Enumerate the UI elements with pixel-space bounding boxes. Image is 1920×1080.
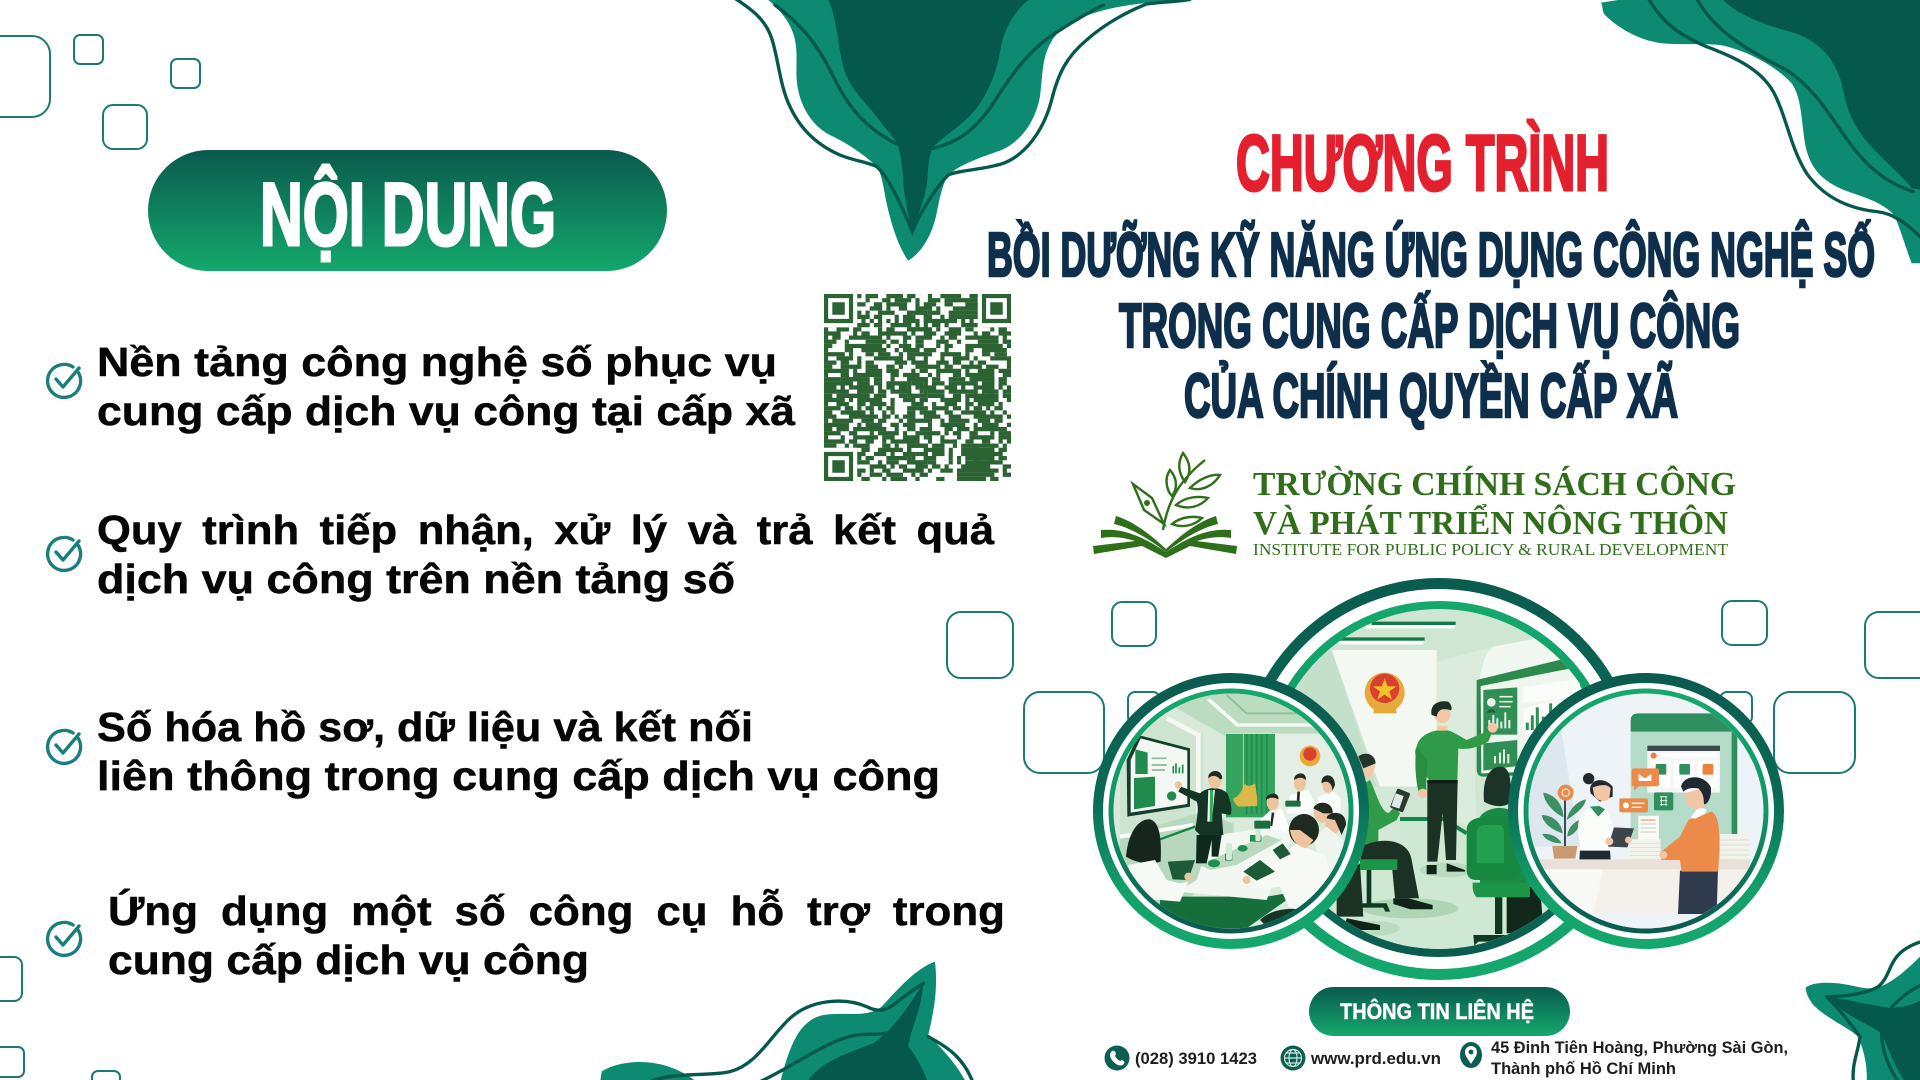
leaf: top centre <box>735 0 1190 261</box>
list item 3: Số hóa hồ sơ, dữ liệu và kết nối <box>97 704 753 750</box>
presenter <box>1178 787 1231 835</box>
icon: phone <box>1104 1046 1130 1070</box>
logo: institute: VÀ PHÁT TRIỂN NÔNG THÔN <box>1253 504 1728 542</box>
emblem <box>1300 746 1320 766</box>
image: right circle, service counter <box>1513 678 1780 950</box>
slide screen <box>1127 735 1190 817</box>
seated person right with chair <box>1484 767 1511 806</box>
icon: check circle 3 <box>48 730 81 763</box>
icon: open book with pen and branch <box>1093 453 1237 558</box>
contact: address: 45 Đinh Tiên Hoàng, Phường Sài Gòn, <box>1491 1038 1788 1057</box>
logo: institute: INSTITUTE FOR PUBLIC POLICY & RURAL DEVELOPMENT <box>1253 540 1728 559</box>
icon: map pin <box>1460 1042 1482 1068</box>
contact: phone <box>1104 1046 1257 1070</box>
list item 2: Quy trình tiếp nhận, xử lý và trả kết quả <box>97 507 995 553</box>
logo: institute: TRƯỜNG CHÍNH SÁCH CÔNG <box>1253 465 1736 503</box>
contact: address: Thành phố Hồ Chí Minh <box>1491 1059 1676 1078</box>
list item 3: liên thông trong cung cấp dịch vụ công <box>97 753 940 799</box>
customer <box>1678 871 1718 914</box>
leaf: bottom right <box>1806 942 1920 1080</box>
bubbles <box>1632 768 1659 786</box>
front woman <box>1126 819 1161 863</box>
leaf: bottom centre <box>600 962 973 1080</box>
icon: check circle 2 <box>48 537 81 570</box>
seated man centre <box>1266 798 1279 810</box>
wall screen <box>1477 655 1580 777</box>
table <box>1160 893 1287 928</box>
image: left circle, meeting room <box>1098 678 1364 950</box>
seated person left <box>1358 754 1375 779</box>
counter <box>1540 859 1750 869</box>
list item 4 <box>48 888 1005 983</box>
contact: address <box>1460 1038 1788 1078</box>
right men <box>1314 803 1330 823</box>
list item 1: cung cấp dịch vụ công tại cấp xã <box>97 388 795 434</box>
standing man <box>1415 729 1492 782</box>
heading pill: NỘI DUNG: NỘI DUNG <box>260 164 556 264</box>
list item 1 <box>48 339 795 434</box>
contact heading pill <box>1309 987 1570 1036</box>
contact heading pill: THÔNG TIN LIÊN HỆ <box>1340 999 1534 1024</box>
back staff <box>1294 778 1306 791</box>
title: programme name <box>987 221 1875 431</box>
title: CHƯƠNG TRÌNH: CHƯƠNG TRÌNH <box>1236 118 1609 207</box>
list item 3 <box>48 704 940 799</box>
clerk <box>1590 780 1613 802</box>
documents <box>1638 816 1659 840</box>
contact: website: www.prd.edu.vn <box>1310 1049 1441 1068</box>
icon: check circle 4 <box>48 922 81 955</box>
heading pill: NỘI DUNG <box>148 150 667 271</box>
plant <box>1564 800 1566 846</box>
logo: institute <box>1093 453 1736 559</box>
list item 2 <box>48 507 995 602</box>
list item 4: cung cấp dịch vụ công <box>108 937 589 983</box>
list item 4: Ứng dụng một số công cụ hỗ trợ trong <box>108 888 1005 934</box>
icon: globe <box>1280 1046 1306 1070</box>
floor <box>1117 812 1233 913</box>
contact: website <box>1280 1046 1441 1070</box>
icon: check circle 1 <box>48 364 81 397</box>
list item 1: Nền tảng công nghệ số phục vụ <box>97 339 777 385</box>
contact: phone: (028) 3910 1423 <box>1135 1049 1257 1068</box>
floor <box>1329 822 1549 949</box>
emblem <box>1365 673 1405 713</box>
app window <box>1647 746 1720 793</box>
QR code <box>824 294 1011 481</box>
leaf: top right <box>1601 0 1920 263</box>
list item 2: dịch vụ công trên nền tảng số <box>97 556 735 602</box>
front man <box>1272 844 1330 909</box>
image: central circle, official presenting <box>1244 584 1634 974</box>
